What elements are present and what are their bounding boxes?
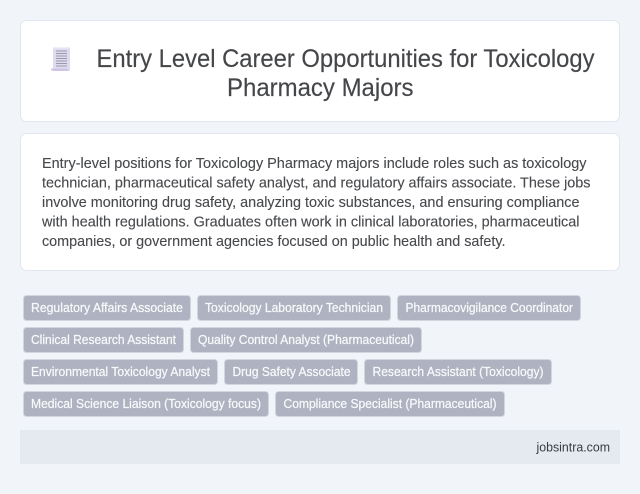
title (96, 45, 595, 102)
text block: description (41, 156, 591, 250)
tag: Quality Control Analyst (Pharmaceutical): Quality Control Analyst (Pharmaceutical) (198, 333, 414, 347)
tag: Toxicology Laboratory Technician: Toxicology Laboratory Technician (205, 301, 383, 315)
tag: Environmental Toxicology Analyst: Environmental Toxicology Analyst (31, 365, 210, 379)
title: Entry Level Career Opportunities for Toxicology (96, 45, 595, 73)
text block: description: companies, or government agencies focused on public health and safety. (42, 234, 506, 250)
tag: Medical Science Liaison (Toxicology focus): Medical Science Liaison (Toxicology focus) (31, 397, 261, 411)
tag: Compliance Specialist (Pharmaceutical): Compliance Specialist (Pharmaceutical) (284, 397, 496, 411)
tag: Medical Science Liaison (Toxicology focus) (24, 392, 268, 416)
footer bar (20, 430, 620, 464)
tag: Drug Safety Associate (224, 360, 358, 384)
tag: Research Assistant (Toxicology): Research Assistant (Toxicology) (372, 365, 544, 379)
text block: description: with health regulations. Graduates often work in clinical laboratories, pharmaceutical (41, 214, 580, 230)
tag: Drug Safety Associate: Drug Safety Associate (232, 365, 351, 379)
tag: Clinical Research Assistant (24, 328, 184, 352)
tag: Regulatory Affairs Associate: Regulatory Affairs Associate (31, 301, 183, 315)
text block: description: involve monitoring drug safety, analyzing toxic substances, and ensuring compliance (42, 195, 580, 211)
title: Pharmacy Majors (227, 74, 414, 102)
panel: description card (20, 134, 620, 270)
tag: Clinical Research Assistant: Clinical Research Assistant (31, 333, 176, 347)
icon: document scroll (51, 47, 70, 71)
tag: Pharmacovigilance Coordinator (398, 296, 580, 320)
text block: description: technician, pharmaceutical safety analyst, and regulatory affairs associate. These jobs (42, 176, 590, 192)
panel: header card (20, 20, 620, 122)
tag: Regulatory Affairs Associate (24, 296, 190, 320)
tag list: job titles (24, 296, 580, 416)
footer source text: jobsintra.com (536, 440, 610, 454)
tag: Pharmacovigilance Coordinator: Pharmacovigilance Coordinator (406, 301, 573, 315)
tag: Environmental Toxicology Analyst (24, 360, 218, 384)
text block: description: Entry-level positions for Toxicology Pharmacy majors include roles such as toxicology (42, 156, 587, 172)
tag: Compliance Specialist (Pharmaceutical) (276, 392, 504, 416)
tag: Research Assistant (Toxicology) (364, 360, 552, 384)
tag: Toxicology Laboratory Technician (198, 296, 390, 320)
tag: Quality Control Analyst (Pharmaceutical) (190, 328, 422, 352)
